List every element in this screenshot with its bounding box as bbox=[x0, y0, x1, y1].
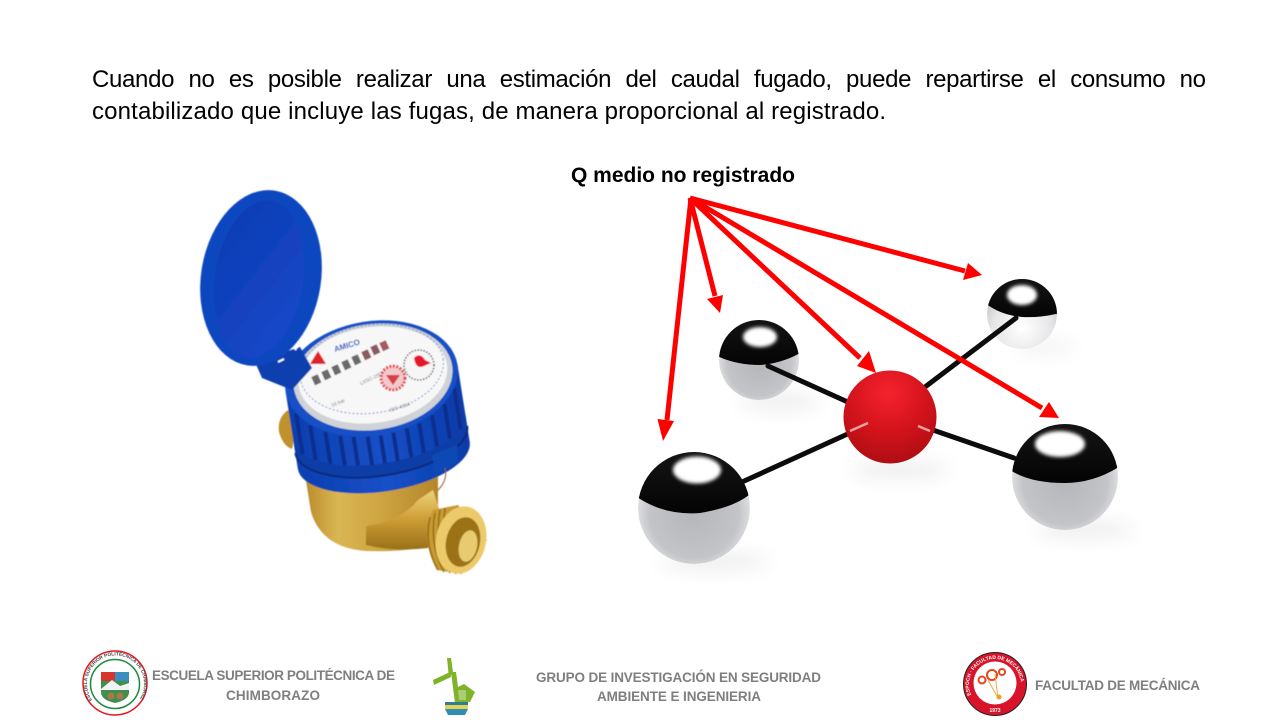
text: ESPOCH name: ESCUELA SUPERIOR POLITÉCNICA DE bbox=[152, 668, 395, 683]
sphere: back left bbox=[719, 320, 799, 400]
meter threaded outlet bbox=[427, 502, 493, 578]
logo: Facultad de Mecánica: 1973 bbox=[989, 708, 1001, 714]
meter seal wire bbox=[438, 468, 446, 490]
floor shadows bbox=[660, 342, 1135, 570]
logo: research group plant bbox=[433, 658, 475, 715]
arrow: to red sphere bbox=[690, 198, 876, 373]
meter lid hinge bbox=[255, 347, 312, 390]
sphere: back right bbox=[987, 279, 1057, 349]
meter blue housing bbox=[277, 308, 475, 504]
logo: Facultad de Mecánica bbox=[963, 652, 1027, 716]
image: molecule spheres bbox=[630, 275, 1135, 570]
meter brass outlet bbox=[366, 490, 440, 549]
logo: ESPOCH seal bbox=[82, 650, 148, 716]
text: research group name: AMBIENTE E INGENIERIA bbox=[597, 689, 761, 704]
heading: Q medio no registrado: Q medio no registrado bbox=[571, 164, 795, 187]
logo: ESPOCH seal: ESCUELA SUPERIOR POLITÉCNICA DE CHIMBORAZO bbox=[84, 652, 148, 702]
arrows to spheres bbox=[658, 198, 1059, 441]
meter small dial text bbox=[331, 371, 411, 414]
meter brass body bbox=[304, 468, 438, 551]
arrow: to front left sphere bbox=[658, 198, 691, 441]
image: water meter bbox=[188, 181, 493, 578]
meter brand bbox=[310, 338, 361, 364]
text: research group name: GRUPO DE INVESTIGACIÓN EN SEGURIDAD bbox=[536, 670, 821, 685]
meter small gauge bbox=[404, 350, 434, 380]
meter lid clips bbox=[278, 347, 297, 362]
text: ESPOCH name: CHIMBORAZO bbox=[226, 688, 320, 703]
arrow: to front right sphere bbox=[690, 198, 1059, 418]
connecting rods bbox=[742, 318, 1016, 482]
meter seal tab bbox=[432, 445, 458, 475]
meter left pipe stub bbox=[279, 410, 298, 449]
meter brand: AMICO bbox=[333, 338, 361, 354]
meter small dial text: ISO-4064 bbox=[389, 402, 411, 414]
text: ESPOCH name bbox=[152, 668, 395, 703]
meter red star wheel bbox=[381, 366, 405, 390]
arrow: to back left sphere bbox=[690, 198, 723, 313]
intro paragraph: Cuando no es posible realizar una estimación del caudal fugado, puede repartirse el consumo no bbox=[92, 66, 1206, 93]
intro paragraph: contabilizado que incluye las fugas, de manera proporcional al registrado. bbox=[92, 98, 886, 125]
sphere: red centre bbox=[844, 370, 936, 464]
text: Facultad de Mecánica: FACULTAD DE MECÁNICA bbox=[1035, 678, 1200, 693]
text: research group name bbox=[536, 670, 821, 704]
meter dial face bbox=[286, 313, 460, 441]
sphere: front right bbox=[1010, 420, 1122, 530]
meter small dial text: LXSC-15D bbox=[359, 371, 384, 387]
sphere: front left bbox=[638, 452, 750, 564]
meter small dial text: 16 bar bbox=[331, 398, 346, 409]
intro paragraph bbox=[92, 66, 1206, 125]
logo: Facultad de Mecánica: ESPOCH · FACULTAD DE MECÁNICA bbox=[966, 656, 1024, 696]
arrow: to back right sphere bbox=[690, 198, 982, 280]
meter counter digits bbox=[311, 340, 389, 385]
meter open lid bbox=[188, 181, 334, 375]
